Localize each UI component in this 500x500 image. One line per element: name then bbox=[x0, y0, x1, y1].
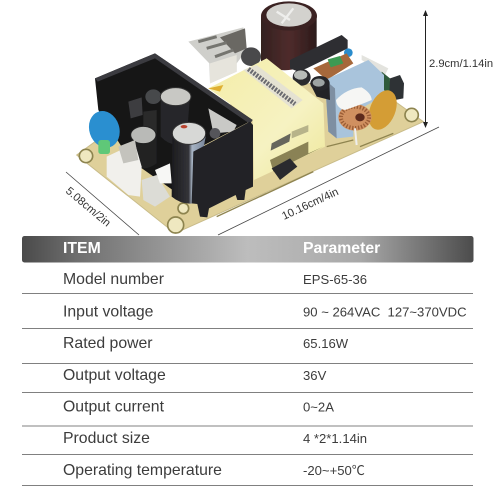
table row: model number: Model number bbox=[63, 271, 164, 288]
table row: input voltage bbox=[63, 304, 467, 320]
circuit board bbox=[77, 72, 423, 233]
product photo: power supply board bbox=[77, 1, 423, 233]
table row: model number: EPS-65-36 bbox=[303, 272, 367, 287]
white trimmer part bbox=[142, 175, 170, 207]
table row: output current: 0~2A bbox=[303, 400, 334, 414]
copper inductor with green tag bbox=[313, 53, 353, 80]
table row: product size: Product size bbox=[63, 430, 150, 447]
transformer maker mark bbox=[271, 133, 291, 151]
white connector right bbox=[362, 55, 388, 75]
table row: operating temperature: Operating temperature bbox=[63, 462, 222, 479]
table row: output current: Output current bbox=[63, 398, 165, 416]
large brown capacitor bbox=[261, 17, 317, 70]
black shield interior bbox=[95, 53, 253, 203]
board traces bbox=[217, 133, 393, 217]
table row: product size: 4 *2*1.14in bbox=[303, 431, 367, 446]
dimension label: height: 2.9cm/1.14in bbox=[429, 58, 493, 70]
table row: product size bbox=[63, 430, 367, 447]
small capacitors bbox=[293, 69, 311, 86]
table row: rated power bbox=[63, 335, 349, 352]
table row: input voltage: 90 ~ 264VAC 127~370VDC bbox=[303, 304, 467, 320]
green LED bbox=[98, 140, 110, 154]
yellow transformer bbox=[208, 58, 325, 180]
dimension: width bbox=[66, 172, 139, 235]
heatsink and connector at rear bbox=[188, 27, 247, 83]
header: parameter: Parameter bbox=[303, 240, 380, 257]
dimension label: width: 5.08cm/2in bbox=[63, 185, 113, 229]
dimension: length bbox=[218, 127, 439, 235]
white connector block bbox=[107, 143, 142, 197]
header: item: ITEM bbox=[63, 240, 101, 257]
toroid coil bbox=[338, 104, 372, 131]
table row: output current bbox=[63, 398, 334, 416]
tall capacitor with blue sleeve bbox=[172, 135, 206, 204]
black shield front panel bbox=[192, 122, 253, 217]
table row: model number bbox=[63, 271, 367, 288]
orange capacitor bbox=[363, 86, 402, 134]
table row: output voltage: 36V bbox=[303, 368, 327, 383]
table header bar bbox=[22, 236, 474, 262]
dimension label: length: 10.16cm/4in bbox=[280, 186, 341, 223]
table row: output voltage: Output voltage bbox=[63, 367, 166, 384]
blue inductor bbox=[325, 60, 384, 138]
black coil clip bbox=[290, 35, 348, 72]
table row: input voltage: Input voltage bbox=[63, 304, 154, 320]
dimension: height bbox=[423, 10, 428, 128]
parts inside shield bbox=[128, 97, 143, 118]
table row: operating temperature: -20~+50℃ bbox=[303, 463, 365, 478]
table row: operating temperature bbox=[63, 462, 365, 479]
dark component right bbox=[388, 75, 404, 100]
blue varistor bbox=[84, 107, 124, 152]
table row: rated power: Rated power bbox=[63, 335, 153, 352]
transformer barcode label bbox=[243, 65, 303, 108]
table row: output voltage bbox=[63, 367, 327, 384]
mounting holes bbox=[79, 108, 418, 233]
table row: rated power: 65.16W bbox=[303, 336, 349, 351]
diode on board bbox=[272, 158, 297, 180]
small dark capacitor bbox=[241, 47, 261, 66]
white glue bbox=[336, 87, 372, 110]
